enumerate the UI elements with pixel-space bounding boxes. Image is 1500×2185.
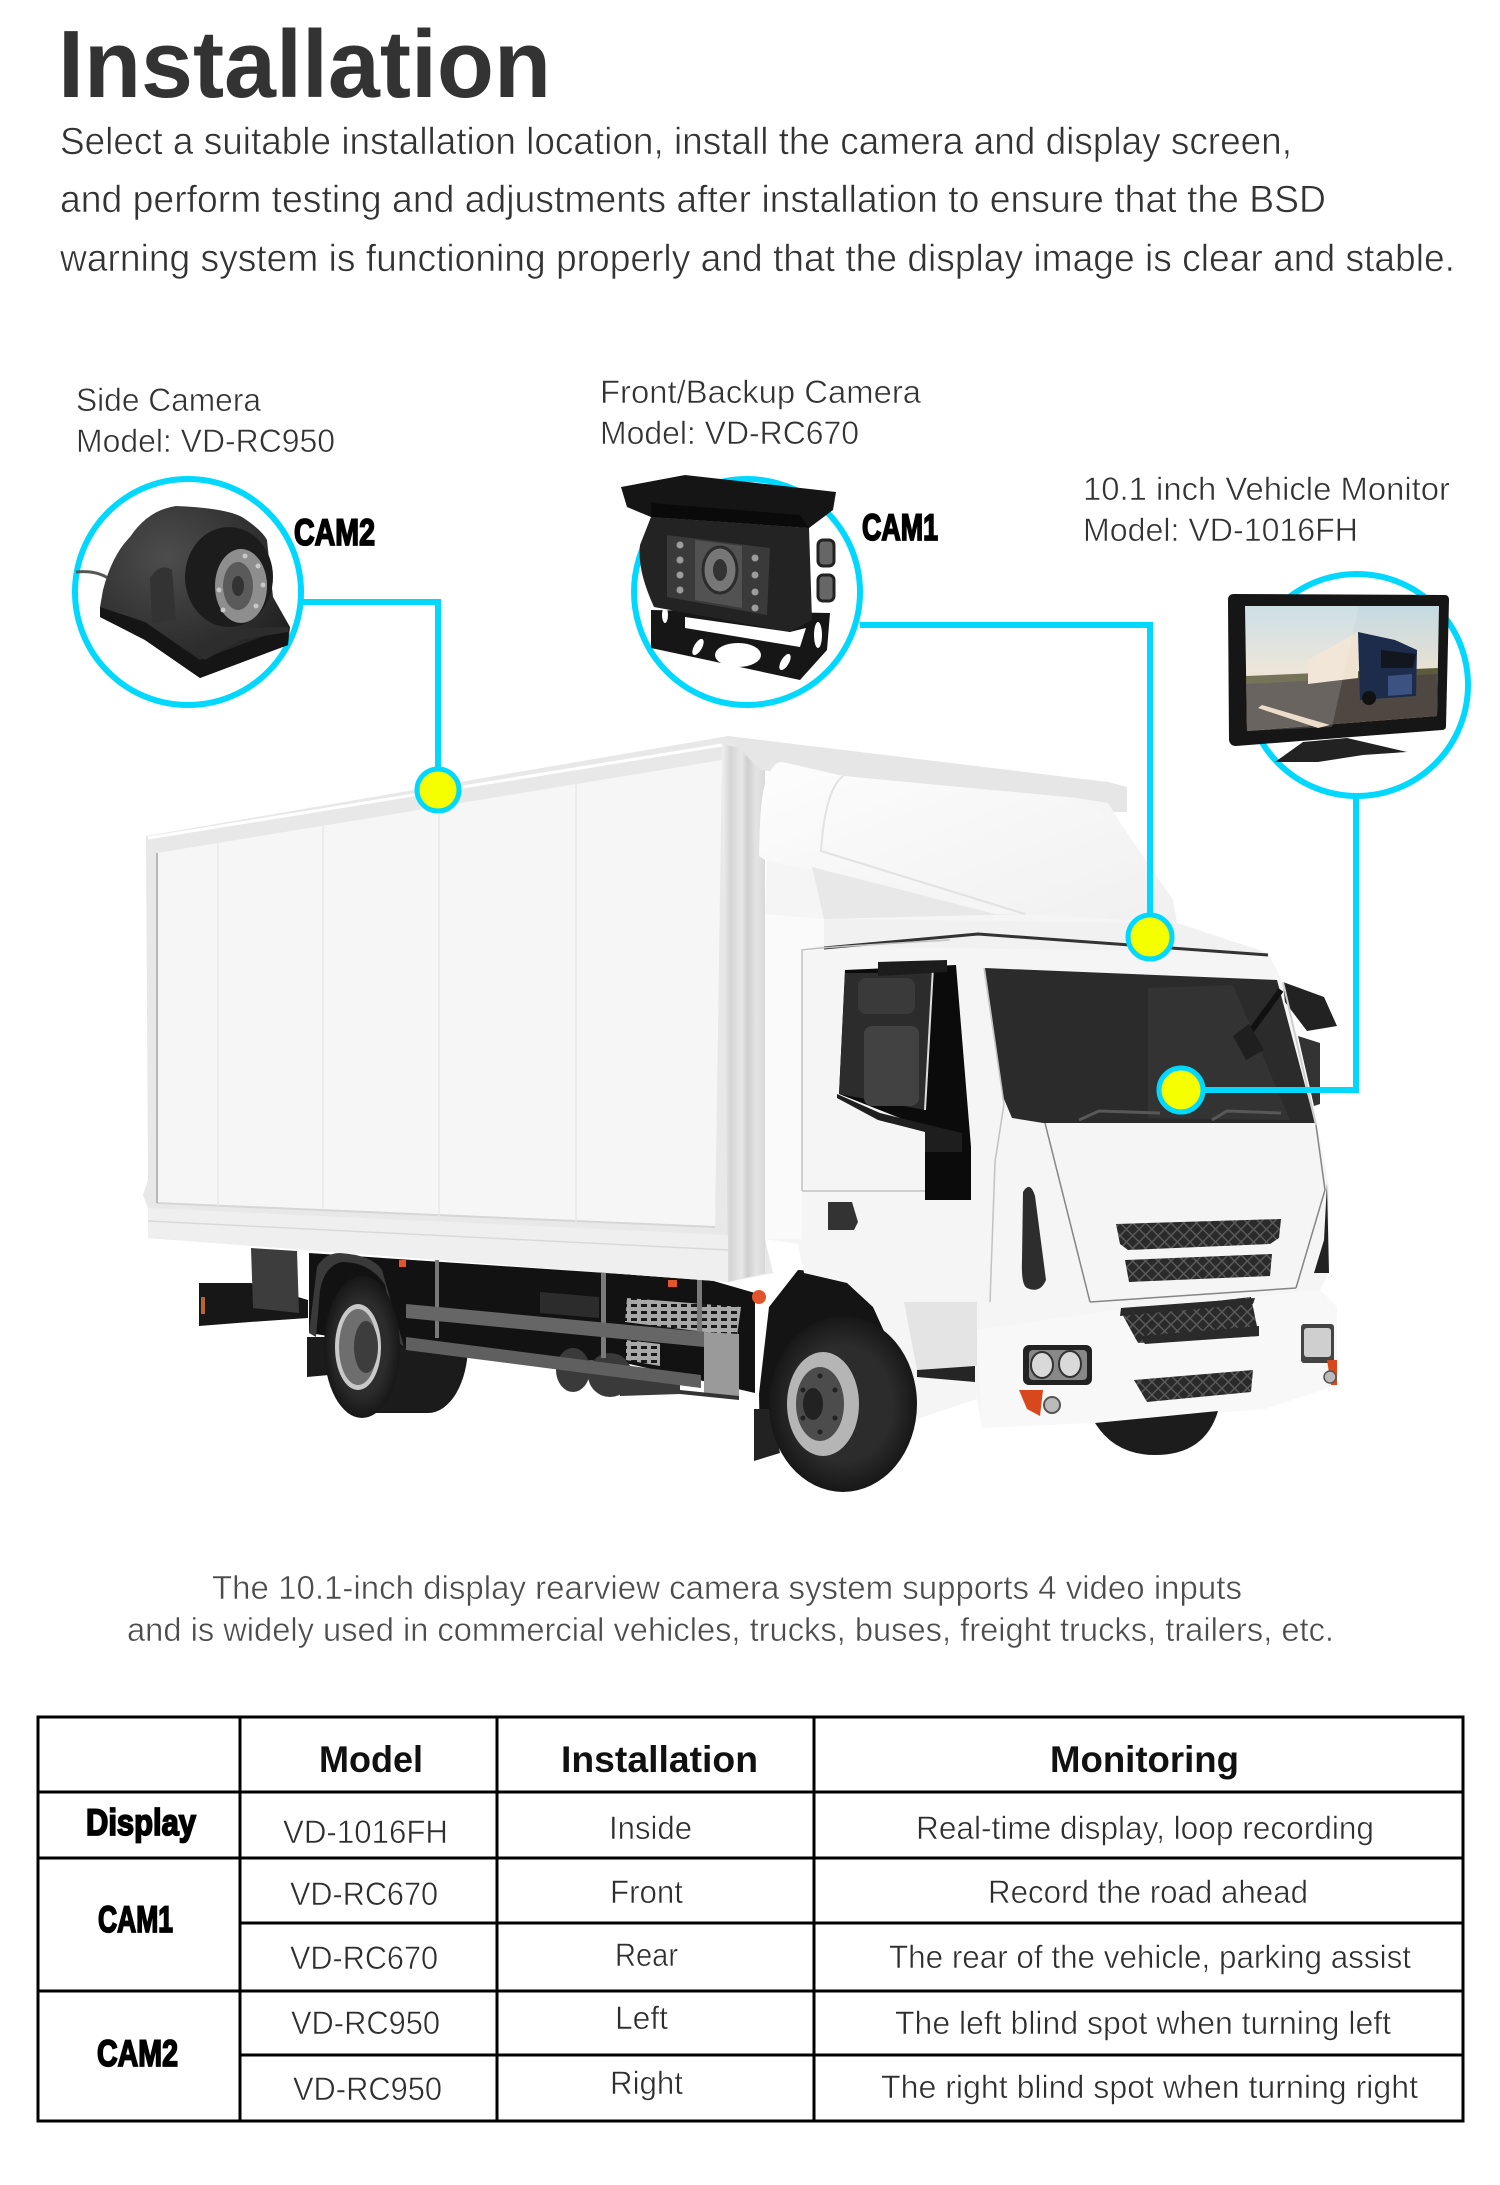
label: side camera: Model: VD-RC950 (76, 423, 335, 459)
connector lines (302, 602, 1356, 1090)
door mirrors (837, 960, 962, 1152)
label: monitor: Model: VD-1016FH (1083, 512, 1358, 548)
rear wheel (324, 1276, 400, 1418)
intro paragraph: and perform testing and adjustments after installation to ensure that the BSD (60, 179, 1326, 221)
monitoring column: Real-time display, loop recording (916, 1810, 1374, 1846)
caption: The 10.1-inch display rearview camera system supports 4 video inputs (212, 1569, 1242, 1606)
label: backup camera: Model: VD-RC670 (600, 415, 859, 451)
ring: backup camera (634, 479, 860, 705)
marker dot: windshield (1159, 1068, 1203, 1112)
model column: VD-RC670 (290, 1876, 438, 1912)
label: CAM2: CAM2 (294, 512, 375, 553)
marker dot: cab roof (1128, 915, 1172, 959)
fairing under-shadow (812, 867, 1025, 919)
side vent (1022, 1187, 1046, 1290)
table (38, 1717, 1463, 2121)
label: side camera: Side Camera (76, 382, 261, 418)
row labels: Display (86, 1802, 196, 1843)
windshield mirror (1233, 982, 1337, 1125)
lower grille (1120, 1297, 1259, 1344)
icon: backup camera (621, 475, 836, 680)
row labels: CAM1 (98, 1899, 173, 1940)
table header: Installation (561, 1739, 758, 1780)
monitoring column: The right blind spot when turning right (881, 2069, 1418, 2105)
door handle (828, 1202, 858, 1230)
rear mudflap (307, 1337, 329, 1377)
front wheel (769, 1316, 917, 1492)
model column (283, 1814, 448, 2107)
ring: side camera (75, 479, 301, 705)
model column: VD-1016FH (283, 1814, 448, 1850)
hood crease lines (1045, 1123, 1325, 1302)
side window (839, 965, 971, 1200)
label: backup camera: Front/Backup Camera (600, 374, 921, 410)
front axle tyre under bumper (1095, 1411, 1218, 1455)
row labels: CAM2 (97, 2033, 178, 2074)
icon: side camera (76, 506, 290, 678)
marker dot: cargo box (417, 769, 459, 811)
bumper grille (1134, 1370, 1253, 1402)
label: side camera (76, 382, 335, 459)
perforated exhaust guard (625, 1298, 741, 1366)
label: backup camera (600, 374, 921, 451)
orange markers (399, 1260, 766, 1304)
caption: and is widely used in commercial vehicles, trucks, buses, freight trucks, trailers, etc. (127, 1611, 1334, 1648)
upper grille (1116, 1219, 1281, 1250)
right indicator and fog lamp (1324, 1360, 1337, 1385)
label: CAM1: CAM1 (862, 507, 938, 548)
rear bumper beam (199, 1283, 308, 1326)
roof band behind the fairing (728, 736, 1127, 812)
windshield (985, 968, 1315, 1123)
cargo box (143, 736, 773, 1282)
rear panel box (251, 1248, 299, 1313)
cab roofline strip (824, 934, 1268, 955)
right headlight (1301, 1324, 1334, 1363)
middle grille (1125, 1254, 1272, 1282)
intro paragraph: Select a suitable installation location, install the camera and display screen, (60, 121, 1292, 163)
title: Installation (58, 11, 551, 118)
ring: monitor (1246, 574, 1468, 796)
fuel tanks below the skirt (556, 1348, 680, 1397)
installation column: Rear (615, 1937, 678, 1973)
wheel well inner panel (904, 1302, 977, 1370)
roof fairing (759, 762, 1177, 923)
installation column (609, 1810, 692, 2101)
label: monitor (1083, 471, 1450, 548)
front mudflap (754, 1409, 780, 1461)
bumper face (977, 1290, 1337, 1428)
intro paragraph: warning system is functioning properly and that the display image is clear and stable. (59, 238, 1455, 280)
right side vent (1314, 1183, 1329, 1273)
monitoring column: Record the road ahead (988, 1874, 1308, 1910)
installation column: Left (615, 2000, 668, 2036)
rear dual tyre (360, 1277, 468, 1413)
battery box (540, 1292, 599, 1318)
cab body (759, 762, 1337, 1428)
chassis uprights (435, 1260, 702, 1358)
model column: VD-RC670 (290, 1940, 438, 1976)
monitoring column (881, 1810, 1418, 2105)
front wheel arch (759, 1270, 917, 1450)
installation column: Front (610, 1874, 683, 1910)
cab step (917, 1366, 975, 1382)
rear mudguard (309, 1253, 404, 1347)
installation column: Inside (609, 1810, 692, 1846)
model column: VD-RC950 (293, 2071, 442, 2107)
monitoring column: The left blind spot when turning left (895, 2005, 1391, 2041)
installation column: Right (610, 2065, 683, 2101)
row labels (86, 1802, 196, 2074)
table header: Monitoring (1050, 1739, 1239, 1780)
icon: monitor (1228, 594, 1449, 762)
left headlight (1023, 1345, 1092, 1385)
left indicator and fog lamp (1019, 1390, 1060, 1416)
table header (319, 1739, 1239, 1780)
label: monitor: 10.1 inch Vehicle Monitor (1083, 471, 1450, 507)
monitoring column: The rear of the vehicle, parking assist (889, 1939, 1411, 1975)
door seams (802, 940, 1004, 1302)
caption (127, 1569, 1334, 1648)
fairing inner crease (821, 776, 1025, 914)
truck illustration (143, 736, 1337, 1492)
model column: VD-RC950 (291, 2005, 440, 2041)
table header: Model (319, 1739, 423, 1780)
side skirt rails (406, 1304, 739, 1400)
rear marker light (201, 1297, 205, 1314)
chassis underbody (309, 1253, 755, 1393)
intro paragraph (59, 121, 1455, 280)
